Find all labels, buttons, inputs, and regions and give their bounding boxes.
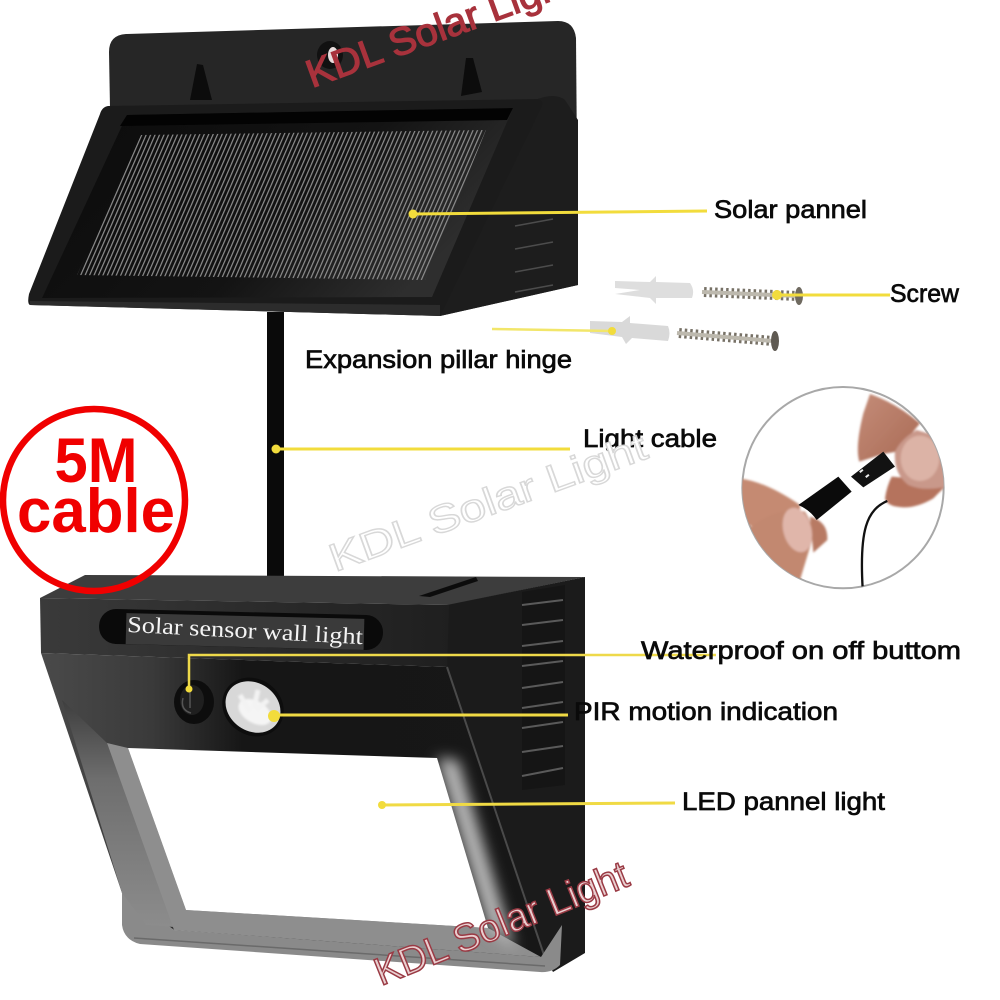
callout: LED panel light: LED pannel light <box>682 788 885 816</box>
photovoltaic cell lines <box>77 130 486 280</box>
chamfer edge <box>447 667 545 958</box>
screw upper <box>702 287 803 305</box>
callout: expansion pillar hinge <box>305 327 616 374</box>
LED panel <box>128 748 488 928</box>
screw lower <box>677 331 779 351</box>
watermark: bottom: KDL Solar Light <box>368 853 635 994</box>
light cable <box>267 312 284 577</box>
callout: screw <box>772 280 960 308</box>
wire <box>862 501 887 588</box>
black plug left <box>798 477 852 520</box>
callout: light cable: Light cable <box>583 425 717 453</box>
side housing <box>447 577 585 972</box>
rim crease <box>134 938 545 966</box>
panel frame <box>28 99 542 316</box>
inner frame <box>107 743 541 957</box>
outer rim <box>122 893 562 972</box>
top slot <box>419 577 478 597</box>
badge: 5M cable <box>3 409 185 591</box>
callout: waterproof on off button <box>186 637 961 692</box>
side housing with vents <box>440 96 578 316</box>
PIR sensor <box>211 666 295 748</box>
solar panel unit <box>28 21 578 316</box>
mounting hole <box>317 41 343 69</box>
callout: LED panel light <box>378 788 885 816</box>
top surface <box>40 575 585 605</box>
lower face <box>41 653 545 958</box>
black plug right <box>851 452 895 487</box>
vent recess <box>522 585 565 790</box>
callout: light cable <box>272 425 717 454</box>
badge: 5M cable: 5M <box>54 426 138 496</box>
side vents <box>522 600 563 776</box>
callout: screw: Screw <box>890 280 960 308</box>
upper front face <box>40 598 449 667</box>
anchor upper <box>615 276 693 304</box>
nameplate <box>99 609 383 650</box>
left frame <box>62 700 174 927</box>
callout: PIR motion indication <box>268 698 838 726</box>
callout: expansion pillar hinge: Expansion pillar hinge <box>305 346 572 374</box>
wall mounting back plate <box>109 21 578 316</box>
right glow <box>437 758 515 950</box>
expansion anchors and screws <box>590 276 803 351</box>
panel glass <box>42 108 513 298</box>
LED light unit <box>40 575 585 972</box>
callout: waterproof on off button: Waterproof on off buttom <box>641 637 961 665</box>
callout: solar panel <box>408 196 867 224</box>
anchor lower <box>590 316 670 344</box>
nameplate: Solar sensor wall light <box>127 612 364 649</box>
callout: solar panel: Solar pannel <box>714 196 867 224</box>
upper hand <box>858 394 950 507</box>
lower hand <box>737 478 827 580</box>
callout: PIR motion indication: PIR motion indication <box>574 698 838 726</box>
on off button <box>174 680 214 724</box>
badge: 5M cable: cable <box>17 477 175 546</box>
glass top shadow <box>120 108 513 126</box>
connector detail circle <box>737 387 950 588</box>
front lip highlight <box>30 301 440 316</box>
watermark: center: KDL Solar Light <box>323 425 653 580</box>
mounting pins <box>190 58 482 100</box>
